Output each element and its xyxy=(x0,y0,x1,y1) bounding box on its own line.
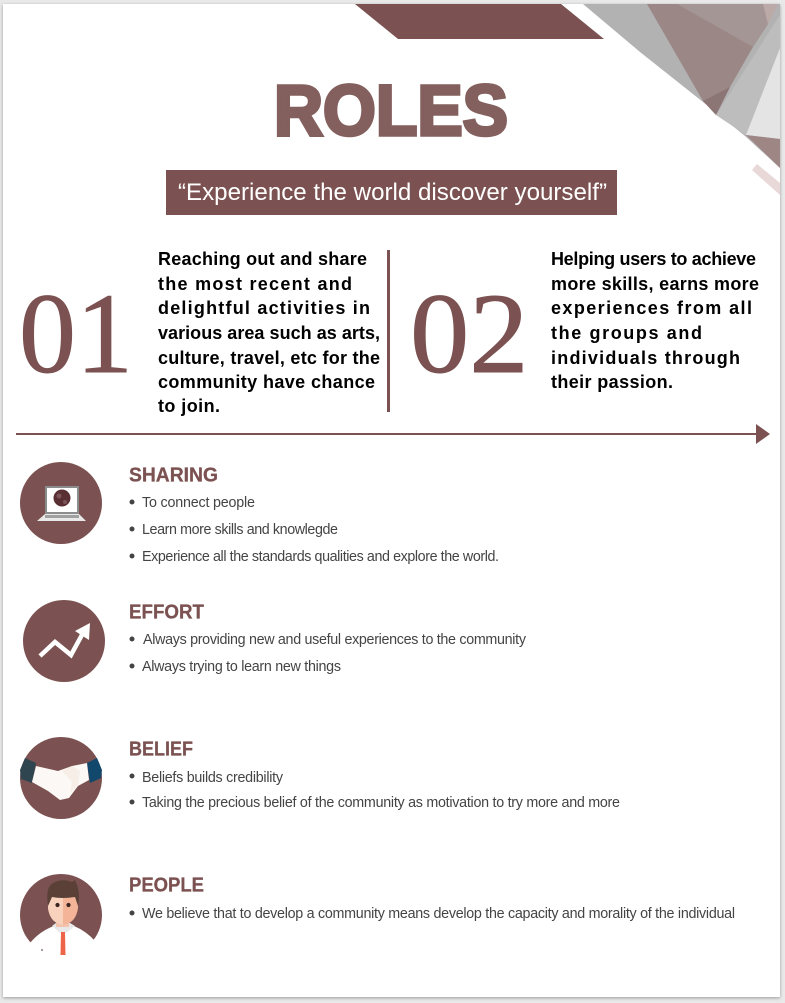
role 02 text: the groups and xyxy=(551,323,702,343)
role 02 text: Helping users to achieve xyxy=(551,249,756,269)
role 01 text: various area such as arts, xyxy=(158,323,380,343)
role 01 text: to join. xyxy=(158,396,220,416)
role 02 number: 02 xyxy=(410,271,529,397)
subtitle banner: “Experience the world discover yourself” xyxy=(178,179,607,206)
icon: handshake xyxy=(20,737,102,819)
role 01 text: delightful activities in xyxy=(158,298,370,318)
section: people: We believe that to develop a community means develop the capacity and morality of the individual xyxy=(142,906,735,922)
section: effort: EFFORT xyxy=(129,600,204,624)
role 01 text: Reaching out and share xyxy=(158,249,367,269)
role 02 text xyxy=(551,249,759,392)
section: belief xyxy=(20,737,620,819)
role 01 text: the most recent and xyxy=(158,274,352,294)
timeline arrow xyxy=(16,424,770,444)
role 01 text xyxy=(158,249,380,416)
icon: man with tie xyxy=(20,874,105,965)
section: sharing: SHARING xyxy=(129,464,218,486)
subtitle banner xyxy=(166,170,617,215)
section: people: PEOPLE xyxy=(129,874,204,896)
section: sharing: To connect people xyxy=(142,495,255,511)
section: belief: Beliefs builds credibility xyxy=(142,770,284,786)
corner polygon decoration xyxy=(583,4,780,195)
section: sharing xyxy=(20,462,499,565)
section: effort: Always trying to learn new things xyxy=(142,659,341,675)
top banner shape xyxy=(355,4,604,39)
icon: rising arrow xyxy=(23,600,105,682)
role 01 number: 01 xyxy=(19,270,133,397)
role 02 text: their passion. xyxy=(551,372,673,392)
title: ROLES xyxy=(274,72,508,151)
icon: laptop with globe xyxy=(20,462,102,544)
role 02 text: experiences from all xyxy=(551,298,752,318)
role 01 text: culture, travel, etc for the xyxy=(158,348,380,368)
section: people xyxy=(20,874,735,965)
role 02 text: individuals through xyxy=(551,348,740,368)
section: sharing: Experience all the standards qualities and explore the world. xyxy=(142,549,499,565)
section: sharing: Learn more skills and knowlegde xyxy=(142,522,338,538)
role 02 text: more skills, earns more xyxy=(551,274,759,294)
role 01 text: community have chance xyxy=(158,372,375,392)
section: effort: Always providing new and useful experiences to the community xyxy=(143,632,527,648)
section: belief: Taking the precious belief of the community as motivation to try more and more xyxy=(142,795,620,811)
section: belief: BELIEF xyxy=(129,738,193,760)
section: effort xyxy=(23,600,527,682)
